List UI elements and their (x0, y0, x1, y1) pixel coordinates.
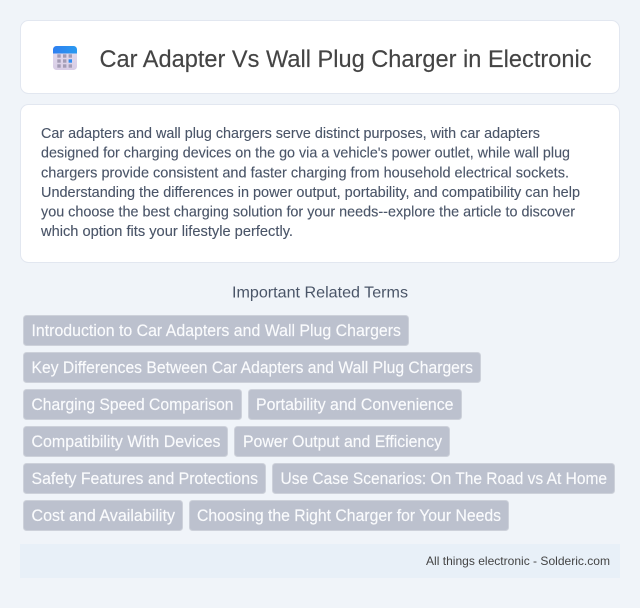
tag (24, 390, 242, 420)
tag (24, 316, 408, 346)
tag (24, 426, 228, 456)
tag: Charging Speed Comparison (32, 396, 234, 414)
text block: description: which option fits your lifestyle perfectly. (40, 224, 293, 240)
tag: Introduction to Car Adapters and Wall Plug Chargers (32, 322, 401, 340)
panel: term tags (24, 316, 614, 530)
tag (248, 390, 462, 420)
text block: description: chargers provide consistent and faster charging from household electrical sockets. (41, 166, 569, 182)
heading: related terms: Important Related Terms (232, 284, 408, 302)
text block: description: Car adapters and wall plug chargers serve distinct purposes, with car adapters (41, 126, 540, 142)
tag (190, 500, 508, 530)
title: Car Adapter Vs Wall Plug Charger in Electronic (100, 46, 592, 73)
tag (272, 464, 614, 494)
footer: All things electronic - Solderic.com (426, 554, 610, 568)
icon: calendar (53, 46, 77, 70)
tag: Portability and Convenience (256, 396, 454, 414)
tag: Cost and Availability (32, 507, 176, 525)
text block: description: designed for charging devices on the go via a vehicle's power outlet, while wall plug (41, 146, 570, 162)
tag: Safety Features and Protections (32, 470, 258, 488)
tag (24, 500, 182, 530)
text block: description: Understanding the differences in power output, portability, and compatibility can help (41, 185, 580, 201)
tag: Key Differences Between Car Adapters and Wall Plug Chargers (32, 359, 473, 377)
footer (20, 544, 620, 578)
tag: Use Case Scenarios: On The Road vs At Home (280, 470, 607, 488)
panel: title card (20, 20, 620, 94)
tag (234, 426, 450, 456)
text block: description: you choose the best charging solution for your needs--explore the article to discover (41, 204, 575, 220)
panel: intro paragraph (20, 104, 620, 262)
text block: description (40, 126, 580, 240)
tag: Power Output and Efficiency (243, 433, 443, 451)
tag: Compatibility With Devices (32, 433, 220, 451)
tag (24, 464, 266, 494)
tag: Choosing the Right Charger for Your Needs (197, 507, 501, 525)
tag (24, 352, 480, 382)
